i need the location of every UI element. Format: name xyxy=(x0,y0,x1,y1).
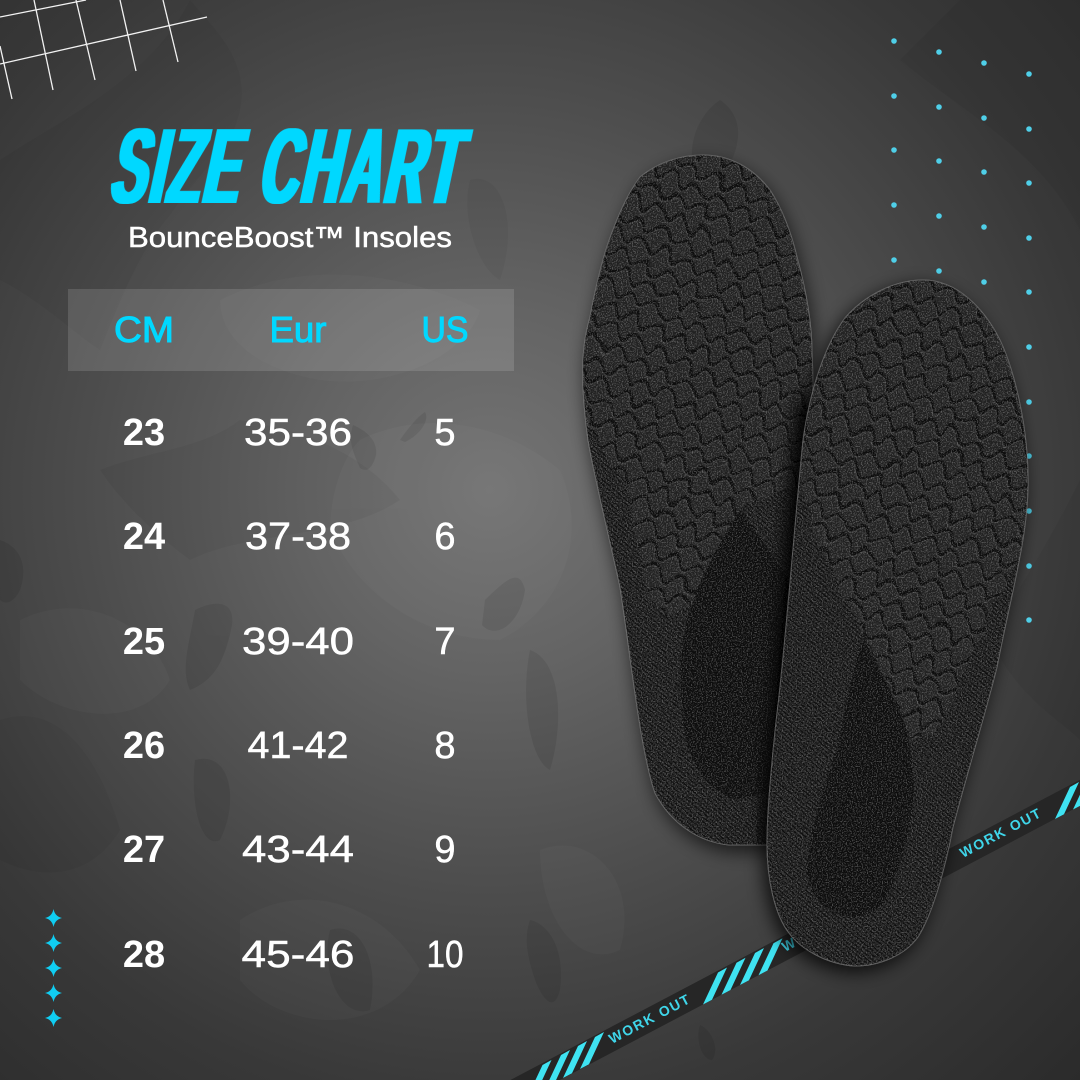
forefoot texture xyxy=(800,280,1028,740)
ribbon label hidden: WORK OUT xyxy=(779,899,866,955)
row 23 xyxy=(123,412,456,454)
arch recess xyxy=(681,511,786,798)
row 25: 7 xyxy=(434,621,456,663)
right insole xyxy=(760,260,1050,975)
ribbon label lower: WORK OUT xyxy=(606,991,693,1047)
title: SIZE CHART xyxy=(103,107,479,227)
corner grid lines xyxy=(0,0,207,99)
row 24 xyxy=(123,516,456,558)
stripes, lower left group xyxy=(528,1032,604,1080)
row 24: 37-38 xyxy=(245,516,351,558)
left insole xyxy=(576,154,822,860)
row 28 xyxy=(123,934,464,976)
row 28: 28 xyxy=(123,934,165,976)
row 27 xyxy=(123,829,456,871)
row 26: 8 xyxy=(434,725,456,767)
row 25: 39-40 xyxy=(242,621,354,663)
row 27: 9 xyxy=(434,829,456,871)
table header: US xyxy=(422,309,468,350)
row 26: 41-42 xyxy=(248,725,348,767)
row 26: 26 xyxy=(123,725,165,767)
row 27: 27 xyxy=(123,829,165,871)
row 23: 23 xyxy=(123,412,165,454)
row 26 xyxy=(123,725,456,767)
row 28: 10 xyxy=(426,934,464,976)
ribbon: work out xyxy=(500,772,1080,1080)
row 24: 6 xyxy=(434,516,456,558)
icon: sparkle column xyxy=(45,909,62,1027)
row 27: 43-44 xyxy=(242,829,354,871)
row 25: 25 xyxy=(123,621,165,663)
arch recess xyxy=(807,637,914,917)
row 24: 24 xyxy=(123,516,165,558)
table header xyxy=(68,289,514,371)
subtitle: BounceBoost™ Insoles xyxy=(128,222,452,254)
row 23: 35-36 xyxy=(244,412,352,454)
size table rows xyxy=(123,412,464,976)
stripes, upper right group xyxy=(1055,772,1080,819)
dot grid xyxy=(891,38,1032,623)
row 23: 5 xyxy=(434,412,456,454)
forefoot texture xyxy=(582,155,812,618)
row 28: 45-46 xyxy=(242,934,354,976)
stripes, middle group xyxy=(703,938,782,1004)
shaded gap beside right insole xyxy=(775,400,812,850)
table header: CM xyxy=(114,309,174,350)
row 25 xyxy=(123,621,456,663)
ribbon label upper: WORK OUT xyxy=(957,805,1044,861)
table header: Eur xyxy=(270,309,327,350)
